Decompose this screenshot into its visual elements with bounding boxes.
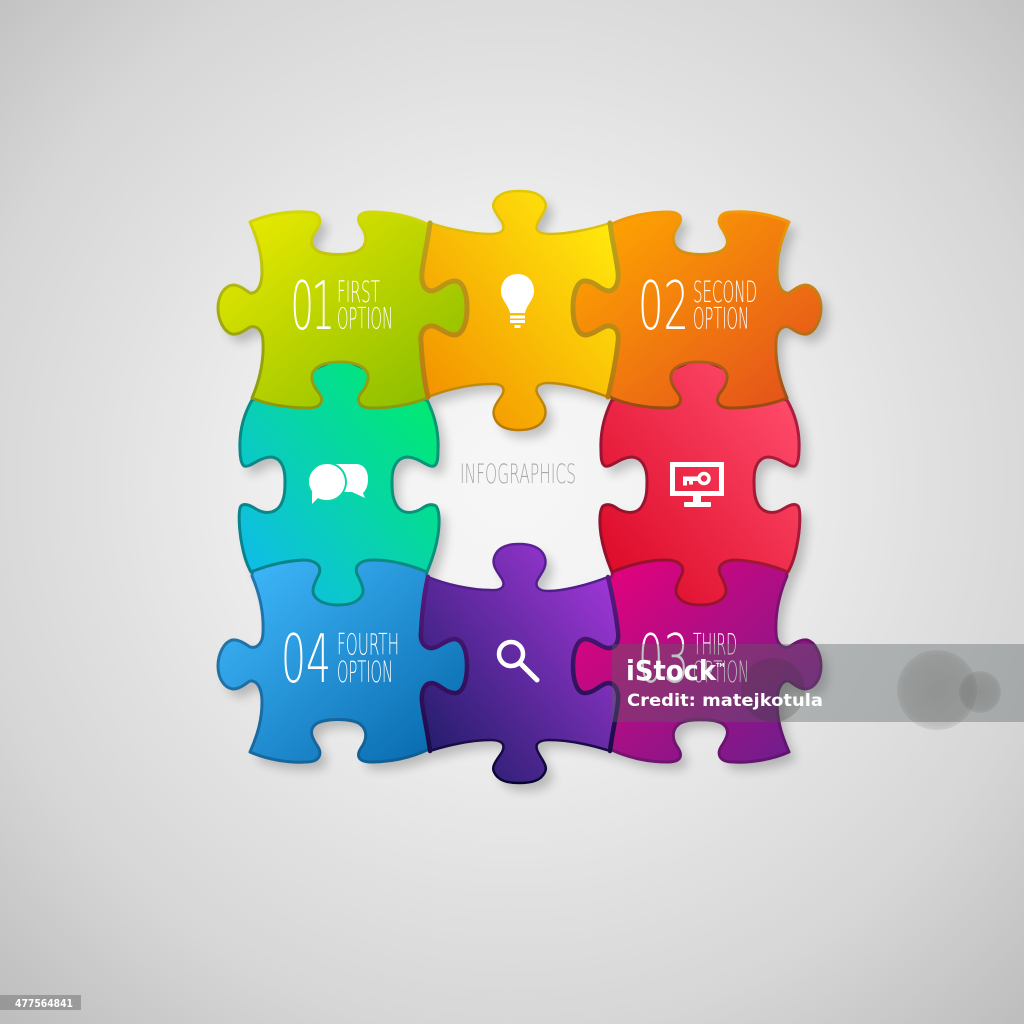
label first option: OPTION: [337, 302, 393, 336]
image id tag: [0, 995, 81, 1010]
watermark logo: iStock: [626, 654, 717, 687]
label third option: [693, 628, 749, 689]
label fourth option: FOURTH: [337, 628, 399, 662]
label first option: [337, 275, 393, 336]
label second option: SECOND: [693, 275, 757, 309]
watermark credit: Credit: matejkotula: [627, 691, 823, 711]
piece: key monitor (red): [600, 358, 800, 605]
number 03: 03: [638, 620, 689, 698]
label second option: [693, 275, 757, 336]
icon: monitor with key: [672, 464, 722, 507]
watermark band: [612, 644, 1024, 730]
label third option: THIRD: [693, 628, 737, 662]
label third option: OPTION: [693, 655, 749, 689]
center title: INFOGRAPHICS: [460, 459, 576, 490]
label second option: OPTION: [693, 302, 749, 336]
icon: speech bubbles: [307, 462, 368, 504]
piece: second option (orange): [567, 212, 821, 408]
label first option: FIRST: [337, 275, 380, 309]
icon: magnifier: [499, 642, 537, 680]
label fourth option: [337, 628, 399, 689]
number 02: 02: [638, 267, 689, 345]
piece: idea (yellow): [421, 191, 618, 430]
label fourth option: OPTION: [337, 655, 393, 689]
piece: chat (teal): [239, 358, 439, 605]
watermark circles: [741, 650, 1001, 730]
piece: first option (green): [218, 212, 472, 408]
icon: light bulb: [501, 274, 534, 328]
number 04: 04: [281, 620, 331, 698]
number 01: 01: [290, 267, 335, 345]
trademark: TM: [716, 663, 724, 669]
drop shadows: [225, 199, 828, 791]
image id tag: 477564841: [15, 997, 73, 1010]
piece: third option (magenta): [567, 544, 821, 762]
piece: search (purple): [421, 544, 618, 783]
piece: fourth option (blue): [218, 544, 472, 762]
